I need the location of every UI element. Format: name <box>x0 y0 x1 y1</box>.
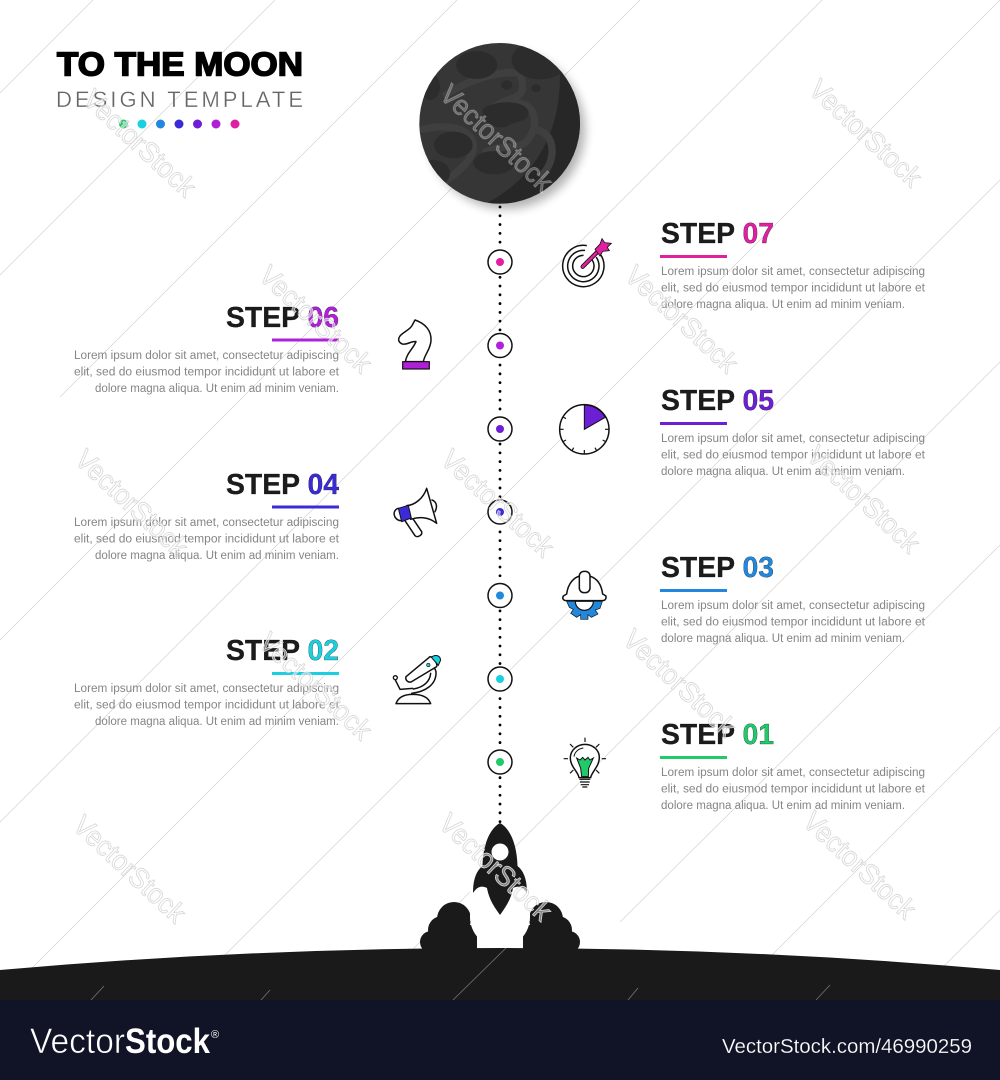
node 05 <box>488 417 512 441</box>
step 06: dolore magna aliqua. Ut enim ad minim veniam. <box>95 383 339 395</box>
smoke cloud <box>420 902 580 953</box>
step 06 <box>74 302 340 395</box>
step 02: elit, sed do eiusmod tempor incididunt ut labore et <box>74 700 340 712</box>
infographic canvas: VectorStock <box>617 623 743 743</box>
step 06: Lorem ipsum dolor sit amet, consectetur adipiscing <box>74 350 339 362</box>
footer logo: ® <box>211 1029 219 1041</box>
step 06: STEP 06 <box>226 302 339 334</box>
infographic canvas: VectorStock <box>434 78 560 198</box>
step 01: STEP 01 <box>661 719 774 751</box>
icon: megaphone <box>394 488 437 537</box>
icon: helmet and gear <box>563 571 606 619</box>
infographic canvas: VectorStock <box>253 259 379 379</box>
colour dots <box>119 120 240 128</box>
step 05: Lorem ipsum dolor sit amet, consectetur adipiscing <box>661 433 925 445</box>
infographic canvas: VectorStock <box>67 809 193 929</box>
icon: clock <box>560 405 609 454</box>
step 02: dolore magna aliqua. Ut enim ad minim veniam. <box>95 716 339 728</box>
step 04: STEP 04 <box>226 469 339 501</box>
infographic canvas: VectorStock <box>253 626 379 746</box>
footer band <box>0 1000 1000 1080</box>
step 06: elit, sed do eiusmod tempor incididunt ut labore et <box>74 366 340 378</box>
footer logo: Stock <box>125 1022 210 1061</box>
node 02 <box>488 667 512 691</box>
infographic canvas: VectorStock <box>803 73 929 193</box>
moon shadow <box>427 51 585 209</box>
step 03: STEP 03 <box>661 552 774 584</box>
node 06 <box>488 334 512 358</box>
step 07: dolore magna aliqua. Ut enim ad minim veniam. <box>661 299 905 311</box>
step 01: elit, sed do eiusmod tempor incididunt ut labore et <box>661 784 926 796</box>
step 01: Lorem ipsum dolor sit amet, consectetur adipiscing <box>661 767 925 779</box>
step 07: STEP 07 <box>661 218 774 250</box>
node 03 <box>488 584 512 608</box>
title: TO THE MOON <box>57 46 303 82</box>
node 07 <box>488 250 512 274</box>
footer logo: Vector <box>30 1022 125 1061</box>
step 03: Lorem ipsum dolor sit amet, consectetur adipiscing <box>661 600 925 612</box>
step 05: elit, sed do eiusmod tempor incididunt ut labore et <box>661 450 926 462</box>
footer logo <box>30 1022 219 1061</box>
step 04: Lorem ipsum dolor sit amet, consectetur adipiscing <box>74 517 339 529</box>
rocket <box>473 823 527 915</box>
icon: microscope <box>393 655 441 704</box>
dotted path <box>499 207 501 822</box>
smoke hollow <box>470 880 530 947</box>
ground <box>0 948 1000 1000</box>
infographic canvas: VectorStock <box>435 443 561 563</box>
timeline nodes <box>488 250 512 774</box>
step 01: dolore magna aliqua. Ut enim ad minim veniam. <box>661 800 905 812</box>
node 04 <box>488 500 512 524</box>
step 05: dolore magna aliqua. Ut enim ad minim veniam. <box>661 466 905 478</box>
step 01 <box>660 719 926 812</box>
infographic canvas: VectorStock <box>433 807 559 927</box>
icon: light bulb <box>564 738 606 787</box>
icon: chess knight <box>399 320 431 369</box>
step 05 <box>660 385 926 478</box>
infographic canvas: VectorStock <box>801 439 927 559</box>
icon: target <box>555 237 612 295</box>
step 04: dolore magna aliqua. Ut enim ad minim veniam. <box>95 550 339 562</box>
step 04: elit, sed do eiusmod tempor incididunt ut labore et <box>74 534 340 546</box>
infographic canvas: VectorStock <box>797 805 923 925</box>
infographic canvas: VectorStock <box>619 259 745 379</box>
step 03: elit, sed do eiusmod tempor incididunt ut labore et <box>661 616 926 628</box>
step 07: elit, sed do eiusmod tempor incididunt ut labore et <box>661 282 926 294</box>
moon <box>417 40 587 207</box>
title block <box>56 46 303 128</box>
node 01 <box>488 750 512 774</box>
step 04 <box>74 469 340 562</box>
step 02 <box>74 635 340 728</box>
step 07: Lorem ipsum dolor sit amet, consectetur adipiscing <box>661 266 925 278</box>
infographic canvas: VectorStock <box>69 443 195 563</box>
step 03 <box>660 552 926 645</box>
footer url: VectorStock.com/46990259 <box>722 1036 972 1058</box>
infographic canvas: VectorStock <box>77 83 203 203</box>
step 02: STEP 02 <box>226 635 339 667</box>
step 05: STEP 05 <box>661 385 774 417</box>
subtitle: DESIGN TEMPLATE <box>56 87 303 112</box>
step 02: Lorem ipsum dolor sit amet, consectetur adipiscing <box>74 683 339 695</box>
step 07 <box>660 218 926 311</box>
step 03: dolore magna aliqua. Ut enim ad minim veniam. <box>661 633 905 645</box>
